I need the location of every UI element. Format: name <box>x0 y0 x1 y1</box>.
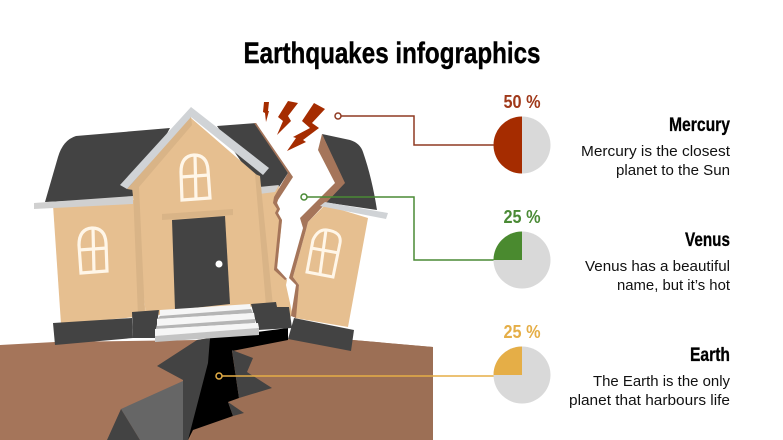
centre roof <box>217 123 288 188</box>
text block: Mercury: Mercury is the closest <box>581 144 730 160</box>
pie chart: Earth 25 <box>494 346 550 404</box>
crack: dark lower shard <box>107 409 140 440</box>
text block: Earth <box>569 345 731 409</box>
text block: Venus <box>585 230 730 294</box>
illustration: cracked house <box>34 107 388 351</box>
text block: Earth: Earth <box>690 345 730 366</box>
text block: Mercury: Mercury <box>669 115 730 136</box>
gable trim <box>120 107 269 189</box>
crack: black fissure <box>183 328 288 440</box>
window: right <box>307 230 340 277</box>
connector: Venus <box>301 194 494 260</box>
illustration: earthquake ground <box>0 328 433 440</box>
cracked side wall <box>258 186 292 320</box>
text block: Earth: The Earth is the only <box>593 374 731 390</box>
door knob <box>216 260 222 268</box>
text block: Venus: Venus <box>685 230 730 251</box>
pie chart: Venus 25 <box>494 232 550 288</box>
crack edge right <box>289 134 345 318</box>
text block: Mercury <box>581 115 730 179</box>
percentage: 25 % Earth: 25 % <box>504 322 540 342</box>
right eave <box>320 202 388 219</box>
right roof <box>322 134 377 210</box>
crack: right shard lower <box>228 402 244 416</box>
foundation right <box>288 318 354 351</box>
left roof <box>45 128 170 202</box>
right wall <box>293 205 368 327</box>
crack edge left <box>254 123 293 280</box>
foundation step block <box>132 310 159 338</box>
icon: lightning bolts <box>263 101 325 151</box>
foundation centre <box>251 302 292 330</box>
text block: Venus: Venus has a beautiful <box>585 259 730 275</box>
left eave <box>34 196 133 209</box>
crack: right shard upper <box>232 350 272 398</box>
side eave <box>259 185 279 194</box>
foundation left <box>53 318 133 345</box>
crack: dark left shard <box>157 338 210 440</box>
connector: Earth <box>216 373 494 379</box>
text block: Earth: planet that harbours life <box>569 393 730 409</box>
side wall seam <box>255 174 273 306</box>
text block: Venus: name, but it’s hot <box>617 278 730 294</box>
window: left <box>79 228 107 273</box>
stairs <box>155 304 259 342</box>
crack: grey left shard <box>121 381 183 440</box>
percentage: 25 % Venus: 25 % <box>504 207 540 227</box>
text block: Mercury: planet to the Sun <box>616 163 730 179</box>
door lintel <box>162 209 233 220</box>
gable wall <box>132 118 270 316</box>
percentage: 50 %: 50 % <box>504 92 540 112</box>
door <box>172 216 230 310</box>
pie chart: Mercury 50 <box>494 116 550 174</box>
title: Earthquakes infographics <box>244 37 540 70</box>
connector: Mercury <box>335 113 494 145</box>
window: gable <box>181 155 210 200</box>
gable inner shadow <box>127 116 192 316</box>
left wall <box>53 200 146 324</box>
